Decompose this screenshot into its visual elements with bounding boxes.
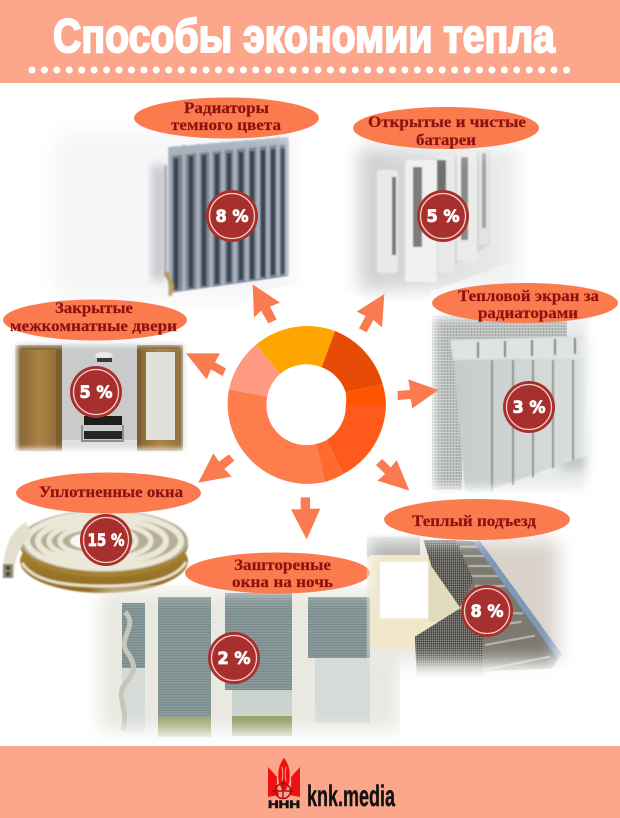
photo: rubber seal coil	[3, 510, 188, 593]
label: sealed windows: Уплотненные окна	[39, 484, 183, 501]
label: curtained windows: окна на ночь	[232, 574, 333, 591]
label: closed interior doors: межкомнатные двери	[10, 318, 177, 335]
label: open clean batteries	[353, 107, 539, 149]
photo: dark cast-iron radiator	[68, 136, 290, 298]
label: dark radiators: темного цвета	[171, 117, 281, 134]
badge: 8 percent stairs: 8 %	[470, 602, 504, 622]
label: sealed windows	[16, 472, 201, 514]
label: open clean batteries: батареи	[416, 132, 476, 149]
brand name: knk.media	[307, 780, 395, 813]
footer band	[0, 746, 620, 818]
badge: 15 percent	[80, 514, 132, 566]
label: curtained windows	[185, 552, 370, 594]
arrow: to open batteries	[357, 294, 384, 332]
panel: heat screen	[425, 283, 618, 500]
panel: dark radiators	[68, 98, 319, 298]
badge: 8 percent	[206, 190, 258, 242]
panel: warm stairwell	[366, 499, 570, 676]
header band	[0, 0, 620, 83]
arrow: to heat screen	[398, 379, 438, 408]
badge: 5 percent	[417, 190, 469, 242]
icon: red trident logo: ННН	[268, 799, 300, 811]
label: curtained windows: Заштореные	[234, 557, 331, 574]
badge: 2 percent: 2 %	[218, 649, 250, 669]
panel: open clean batteries	[345, 107, 539, 300]
badge: 3 percent: 3 %	[512, 398, 546, 418]
label: dark radiators: Радиаторы	[184, 100, 269, 117]
arrow: to sealed windows	[198, 453, 234, 483]
badge: 5 percent: 5 %	[426, 207, 460, 227]
badge: 8 percent stairs	[461, 585, 513, 637]
label: closed interior doors: Закрытые	[55, 300, 133, 317]
white backing behind chart	[188, 284, 424, 520]
badge: 5 percent doors: 5 %	[80, 383, 112, 403]
icon: red trident logo	[268, 758, 300, 811]
label: heat screen: Тепловой экран за	[458, 288, 599, 305]
arrow: to closed doors	[186, 353, 226, 379]
photo: staircase	[366, 534, 567, 676]
label: heat screen: радиаторами	[478, 305, 578, 322]
panel: sealed windows	[3, 472, 201, 593]
badge: 8 percent: 8 %	[216, 207, 248, 227]
badge: 5 percent doors	[70, 366, 122, 418]
donut chart	[228, 326, 386, 484]
photo: aluminium radiator with screen	[432, 315, 592, 493]
label: open clean batteries: Открытые и чистые	[368, 114, 526, 131]
photo: doors and chair	[14, 342, 186, 452]
label: warm stairwell	[384, 499, 570, 540]
arrow: to dark radiators	[253, 284, 280, 323]
arrow: to warm stairwell	[376, 459, 409, 491]
badge: 2 percent	[208, 632, 260, 684]
photo: window blinds	[80, 585, 400, 745]
dotted divider	[32, 66, 567, 74]
label: warm stairwell: Теплый подъезд	[412, 513, 536, 530]
arrows around chart	[186, 284, 438, 539]
panel: curtained windows at night	[80, 552, 400, 745]
badge: 15 percent: 15 %	[88, 531, 124, 551]
photo: white radiator	[351, 140, 518, 298]
label: dark radiators	[134, 98, 319, 138]
label: heat screen	[432, 283, 618, 323]
badge: 3 percent	[503, 381, 555, 433]
arrow: to curtained windows	[291, 497, 320, 539]
panel: closed interior doors	[3, 300, 190, 460]
label: closed interior doors	[3, 300, 187, 340]
